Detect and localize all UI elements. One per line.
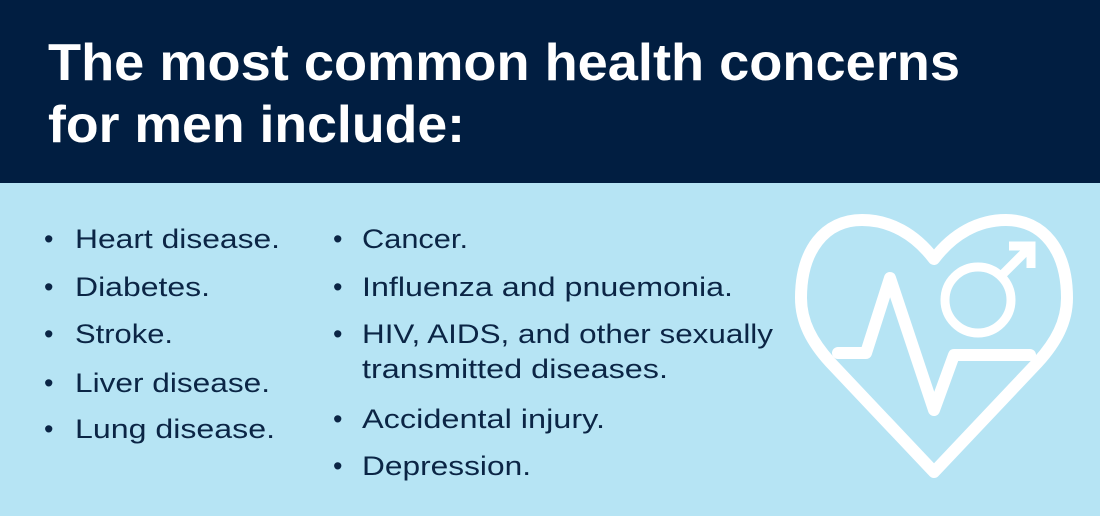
list: column 2: •: [333, 224, 342, 254]
title: for men include:: [48, 96, 465, 154]
list: column 2: •: [333, 404, 342, 434]
list: column 1: •: [44, 368, 53, 398]
list: column 1: Heart disease.: [75, 224, 280, 254]
list: column 1: •: [44, 272, 53, 302]
list: column 1: •: [44, 414, 53, 444]
list: column 2: •: [333, 272, 342, 302]
list: column 1: •: [44, 224, 53, 254]
list: column 2: HIV, AIDS, and other sexually: [362, 319, 774, 349]
list: column 1: Liver disease.: [75, 368, 270, 398]
list: column 2: Influenza and pnuemonia.: [362, 272, 733, 302]
list: column 2: Depression.: [362, 451, 531, 481]
list: column 2: Cancer.: [362, 224, 468, 254]
panel: body: [0, 183, 1100, 516]
list: column 2: •: [333, 319, 342, 349]
title: The most common health concerns: [48, 34, 960, 92]
panel: header: [0, 0, 1100, 183]
list: column 2: Accidental injury.: [362, 404, 605, 434]
list: column 1: •: [44, 319, 53, 349]
list: column 2: transmitted diseases.: [362, 354, 668, 384]
list: column 1: Lung disease.: [75, 414, 275, 444]
list: column 2: •: [333, 451, 342, 481]
list: column 1: Diabetes.: [75, 272, 210, 302]
title: [48, 34, 960, 154]
list: column 1: Stroke.: [75, 319, 173, 349]
list: column 2: [333, 224, 774, 481]
list: column 1: [44, 224, 280, 444]
icon: heart with pulse and male symbol: [801, 220, 1067, 472]
